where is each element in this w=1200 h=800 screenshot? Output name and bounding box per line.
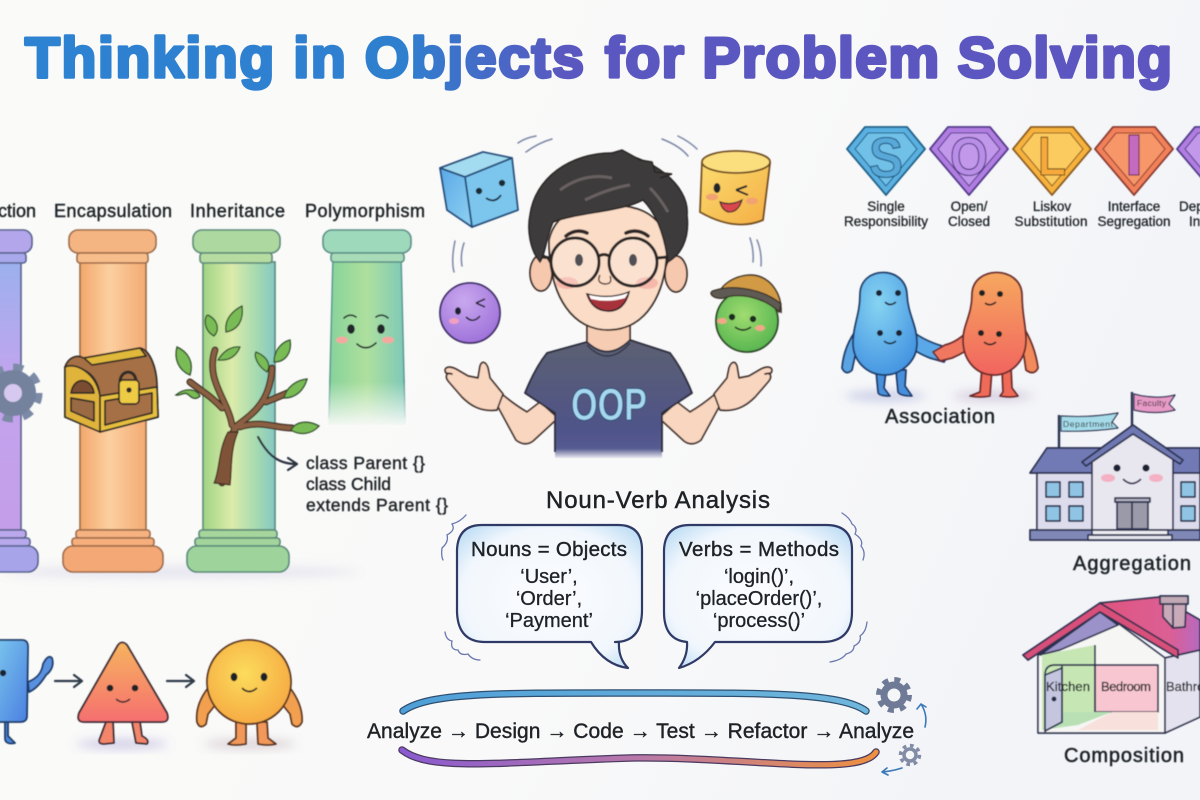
code snippet: [306, 453, 448, 515]
speech bubble: verbs: ‘placeOrder()’,: [696, 588, 822, 610]
process steps text: Analyze → Design → Code → Test → Refactor → Analyze: [367, 720, 914, 743]
room labels: Kitchen: [1046, 679, 1090, 694]
character: yellow circle: [197, 640, 302, 745]
arrow: inheritance to code: [258, 437, 297, 470]
SOLID labels: Interface: [1108, 199, 1160, 214]
panel: four pillars of OOP: [0, 201, 448, 578]
code snippet: class Child: [306, 474, 391, 494]
object: green sphere with hat: [711, 275, 781, 352]
badge: O: O: [950, 127, 988, 187]
arrow: small gear to lower arc: [882, 768, 902, 775]
SOLID labels: Segregation: [1098, 214, 1170, 229]
panel: composition: [1023, 596, 1200, 767]
icon: small gear: [900, 746, 920, 764]
label: association: Association: [885, 406, 995, 428]
flag: department: [1059, 413, 1118, 448]
speech bubble: nouns: ‘User’,: [520, 566, 578, 588]
arrow: rectangle to triangle: [55, 675, 82, 687]
arrow: up to large gear: [917, 704, 926, 727]
character: blue rectangle: [0, 640, 53, 743]
speech bubble: verbs: ‘login()’,: [724, 566, 794, 588]
flag: faculty: [1132, 392, 1175, 426]
panel: iterative process cycle: [367, 680, 926, 775]
SOLID labels: Responsibility: [844, 214, 928, 229]
object: purple sphere: [440, 283, 500, 343]
speech bubble: nouns: Nouns = Objects: [471, 538, 627, 561]
icon: gear on abstraction pillar: [0, 367, 39, 419]
pillar: polymorphism: [323, 230, 411, 428]
character: orange: [933, 272, 1038, 397]
panel: juggling programmer: [440, 136, 781, 458]
object: blue cube: [440, 152, 518, 227]
panel: SOLID principles: [844, 125, 1200, 229]
label: aggregation: Aggregation: [1073, 553, 1191, 575]
pillar: inheritance: [187, 230, 289, 572]
neck: [587, 325, 630, 352]
arms and hands: [445, 362, 772, 444]
pillar: abstraction: [0, 230, 38, 572]
SOLID labels: Closed: [948, 214, 990, 229]
SOLID labels: Liskov: [1033, 199, 1071, 214]
label: polymorphism: Polymorphism: [305, 201, 425, 221]
badge: S: [847, 126, 925, 195]
icon: large gear: [878, 680, 910, 710]
flag: department: Department: [1063, 419, 1114, 429]
SOLID labels: Single: [867, 199, 905, 214]
room labels: Bedroom: [1101, 679, 1151, 694]
panel: shape evolution: [0, 640, 302, 749]
speech bubble: verbs: Verbs = Methods: [679, 538, 839, 561]
head: [529, 150, 688, 330]
squiggle accents: [442, 513, 867, 662]
speech bubble: nouns: [457, 525, 642, 668]
badge: I: [1095, 127, 1173, 195]
icon: tree: [176, 306, 319, 485]
SOLID labels: [844, 199, 1200, 229]
badge: D: [1177, 127, 1200, 195]
SOLID labels: Open/: [951, 199, 988, 214]
label: inheritance: Inheritance: [190, 201, 285, 221]
panel: aggregation: [1030, 392, 1200, 575]
speech bubble: nouns: ‘Payment’: [505, 610, 593, 632]
panel: noun-verb analysis: [442, 487, 867, 668]
shirt with OOP: OOP: [571, 379, 647, 430]
badge: L: [1013, 125, 1091, 195]
SOLID labels: Substitution: [1014, 214, 1088, 229]
object: yellow cylinder: [700, 151, 770, 224]
label: composition: Composition: [1064, 745, 1184, 767]
room labels: [1046, 679, 1200, 694]
heading: noun-verb analysis: Noun-Verb Analysis: [546, 487, 770, 514]
flag: faculty: Faculty: [1137, 398, 1167, 408]
icon: house with rooms: [1023, 596, 1200, 733]
icon: school building: [1030, 392, 1200, 540]
process arc: bottom gradient: [402, 750, 876, 765]
code snippet: class Parent {}: [306, 453, 425, 473]
speech bubble: verbs: ‘process()’: [713, 610, 805, 632]
title: Thinking in Objects: [25, 26, 584, 90]
badge: O: [930, 127, 1008, 195]
process arc: top blue: [403, 693, 866, 711]
title: for Problem Solving: [605, 26, 1172, 90]
character: blue: [842, 272, 950, 396]
panel: association: [842, 272, 1038, 428]
code snippet: extends Parent {}: [306, 495, 448, 515]
motion lines: [453, 136, 761, 272]
title: [25, 26, 1172, 90]
icon: treasure chest with lock: [65, 348, 158, 432]
badge: S: S: [869, 126, 903, 190]
speech bubble: verbs: [664, 525, 852, 668]
label: encapsulation: Encapsulation: [54, 201, 172, 221]
pillar: encapsulation: [63, 230, 163, 572]
character: triangle: [78, 642, 168, 744]
shirt with OOP: [525, 340, 692, 458]
arrow: triangle to circle: [167, 675, 194, 687]
speech bubble: nouns: ‘Order’,: [516, 588, 582, 610]
badge: L: L: [1038, 125, 1066, 187]
